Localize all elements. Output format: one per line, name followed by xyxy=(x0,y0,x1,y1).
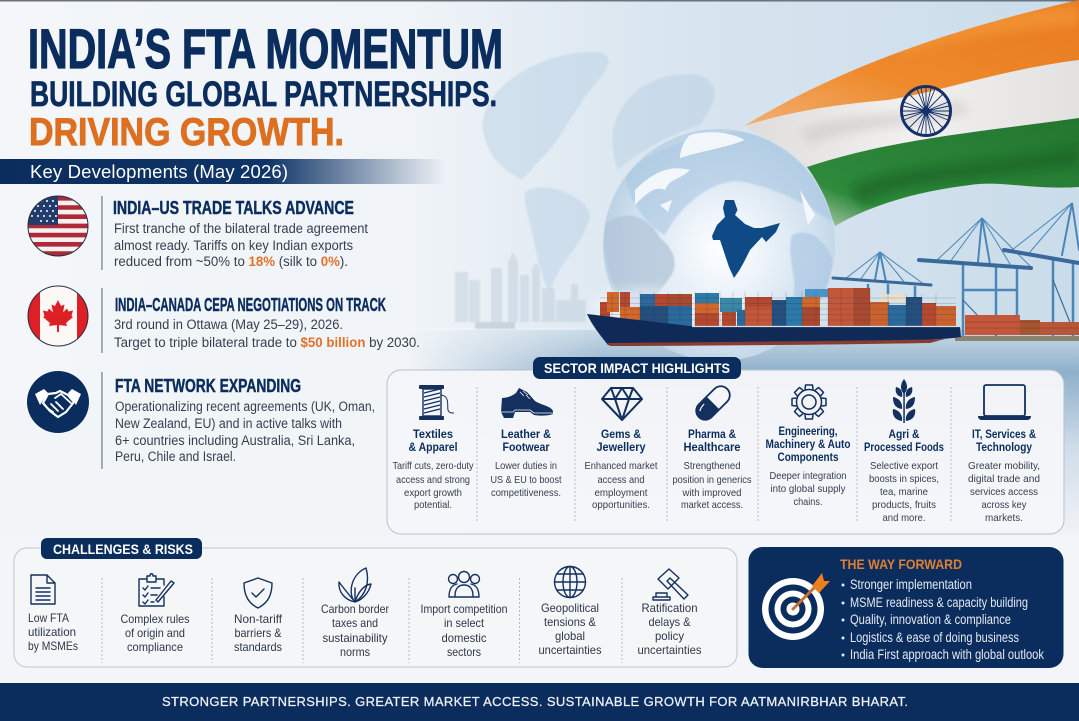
way forward list xyxy=(842,577,1044,662)
footer banner: STRONGER PARTNERSHIPS. GREATER MARKET ACCESS. SUSTAINABLE GROWTH FOR AATMANIRBHAR BHARAT. xyxy=(162,694,908,709)
skyline xyxy=(455,252,586,329)
sector: engineering: chains. xyxy=(794,496,822,508)
development: India-US xyxy=(28,196,368,270)
challenge: non-tariff barriers: Non-tariff xyxy=(234,612,283,626)
sector: leather: competitiveness. xyxy=(491,487,561,499)
heading pill: SECTOR IMPACT HIGHLIGHTS xyxy=(544,360,730,376)
globe with India xyxy=(590,129,836,361)
footer banner xyxy=(0,683,1079,721)
challenge: geopolitical: uncertainties xyxy=(538,643,602,657)
icon: target with arrow xyxy=(762,573,830,640)
sector: agri: boosts in spices, xyxy=(869,473,939,485)
sector: agri: tea, marine xyxy=(880,486,928,498)
challenge: non-tariff barriers: standards xyxy=(234,640,282,654)
challenge: ratification: Ratification xyxy=(642,601,698,615)
development: FTA network xyxy=(27,371,375,469)
India map xyxy=(712,200,780,278)
section band: key developments xyxy=(0,159,445,184)
panel: the way forward xyxy=(748,547,1064,668)
development: India-Canada: 3rd round in Ottawa (May 25–29), 2026. xyxy=(114,317,343,332)
sector: gems: Enhanced market xyxy=(584,460,658,472)
hull xyxy=(587,314,961,345)
sector: IT: IT, Services & xyxy=(972,427,1036,441)
sector: engineering: into global supply xyxy=(770,483,846,495)
challenge: carbon border taxes: norms xyxy=(340,645,370,659)
sector: leather: Leather & xyxy=(501,427,551,441)
sector: engineering: Components xyxy=(778,450,839,464)
sector: pharma: market access. xyxy=(681,499,743,511)
challenge: rules of origin: Complex rules xyxy=(120,612,190,626)
challenge: rules of origin: of origin and xyxy=(125,626,185,640)
development: FTA network: 6+ countries including Australia, Sri Lanka, xyxy=(115,433,355,448)
sector: textiles: Tariff cuts, zero-duty xyxy=(392,460,474,472)
development: FTA network: FTA NETWORK EXPANDING xyxy=(115,376,301,396)
sector: gems: Jewellery xyxy=(596,440,646,454)
challenge: low utilization: Low FTA xyxy=(28,611,69,625)
challenge: rules of origin: compliance xyxy=(127,640,183,654)
way forward list: MSME readiness & capacity building xyxy=(850,595,1028,610)
world map backdrop xyxy=(482,52,715,292)
sector: gems: Gems & xyxy=(601,427,641,441)
challenge: low utilization: utilization xyxy=(28,625,76,639)
flag folds xyxy=(800,5,1079,205)
sector: agri xyxy=(864,379,944,524)
sector: gems xyxy=(584,388,658,511)
sector: agri: Selective export xyxy=(870,460,938,472)
heading pill xyxy=(41,538,202,559)
sector: IT xyxy=(968,385,1040,524)
sector: textiles: access and strong xyxy=(396,474,470,486)
development: India-US: almost ready. Tariffs on key Indian exports xyxy=(114,238,353,253)
sector: leather: US & EU to boost xyxy=(490,474,562,486)
challenge: geopolitical xyxy=(538,566,602,657)
development: India-Canada: INDIA–CANADA CEPA NEGOTIATIONS ON TRACK xyxy=(115,295,386,315)
top edge line xyxy=(0,0,1079,2)
title: DRIVING GROWTH. xyxy=(29,111,344,154)
sector: leather: Lower duties in xyxy=(495,460,557,472)
sector: IT: Technology xyxy=(976,440,1032,454)
challenge: carbon border taxes: taxes and xyxy=(332,616,378,630)
development: India-US: reduced from ~50% to 18% (silk to 0%). xyxy=(114,254,348,269)
development: India-Canada: Target to triple bilateral trade to $50 billion by 2030. xyxy=(114,335,420,350)
challenge: ratification: uncertainties xyxy=(638,643,702,657)
sector: pharma: Healthcare xyxy=(684,440,741,454)
development: India-US: First tranche of the bilateral trade agreement xyxy=(114,221,368,236)
icon: Ashoka Chakra xyxy=(902,86,950,136)
challenge: low utilization xyxy=(28,575,78,653)
sector: IT: services access xyxy=(970,486,1038,498)
icon: handshake xyxy=(27,371,89,433)
sector: agri: Processed Foods xyxy=(864,440,944,454)
sector: engineering: Engineering, xyxy=(778,424,838,438)
challenge: import competition: in select xyxy=(444,616,485,630)
development: FTA network: New Zealand, EU) and in active talks with xyxy=(115,416,342,431)
way forward list: Stronger implementation xyxy=(850,577,972,592)
way forward list: Quality, innovation & compliance xyxy=(850,612,1011,627)
heading pill: CHALLENGES & RISKS xyxy=(53,541,193,557)
challenge: ratification: delays & xyxy=(648,615,690,629)
development: India-US: INDIA–US TRADE TALKS ADVANCE xyxy=(113,198,354,218)
challenge: import competition: Import competition xyxy=(420,602,508,616)
development: FTA network: Operationalizing recent agreements (UK, Oman, xyxy=(115,399,375,414)
way forward list: India First approach with global outlook xyxy=(850,647,1044,662)
title xyxy=(28,17,503,154)
sector: IT: digital trade and xyxy=(968,473,1040,485)
sector: leather xyxy=(490,388,562,499)
challenge: ratification xyxy=(638,569,702,657)
quay containers xyxy=(955,315,1079,341)
haze behind ship xyxy=(590,287,710,323)
sector: agri: and more. xyxy=(882,512,926,524)
container ship xyxy=(587,288,961,346)
sector: leather: Footwear xyxy=(502,440,550,454)
sector: pharma: position in generics xyxy=(672,474,752,486)
sea water xyxy=(0,328,1079,685)
challenge: import competition: domestic xyxy=(442,631,486,645)
sector: engineering: Deeper integration xyxy=(770,470,847,482)
sector: IT: markets. xyxy=(985,512,1023,524)
challenge: carbon border taxes: Carbon border xyxy=(321,602,389,616)
challenge: import competition xyxy=(420,572,508,659)
sector: textiles: Textiles xyxy=(413,427,453,441)
challenge: ratification: policy xyxy=(655,629,684,643)
challenge: rules of origin xyxy=(120,574,190,654)
development: FTA network: Peru, Chile and Israel. xyxy=(115,449,236,464)
title: BUILDING GLOBAL PARTNERSHIPS. xyxy=(30,75,497,114)
sector: engineering: Machinery & Auto xyxy=(766,437,850,451)
containers xyxy=(600,288,956,326)
sector: textiles xyxy=(392,385,474,511)
sector: pharma xyxy=(672,382,752,511)
challenge: carbon border taxes: sustainability xyxy=(322,631,388,645)
challenge: carbon border taxes xyxy=(321,568,389,659)
panel: sector impact highlights xyxy=(387,357,1064,534)
sector: pharma: Pharma & xyxy=(688,427,736,441)
sector: textiles: export growth xyxy=(404,487,462,499)
section band: key developments: Key Developments (May 2026) xyxy=(30,161,288,182)
port cranes xyxy=(833,203,1079,335)
challenge: import competition: sectors xyxy=(447,645,481,659)
sector: gems: opportunities. xyxy=(592,499,650,511)
sector: engineering xyxy=(766,378,850,508)
sector: textiles: & Apparel xyxy=(408,440,458,454)
title: INDIA’S FTA MOMENTUM xyxy=(28,17,503,80)
panel: challenges and risks xyxy=(14,538,737,667)
heading pill xyxy=(533,357,741,379)
sector: gems: employment xyxy=(594,487,648,499)
development: India-Canada xyxy=(28,286,420,353)
challenge: non-tariff barriers: barriers & xyxy=(234,626,282,640)
sector: textiles: potential. xyxy=(414,499,452,511)
sector: gems: access and xyxy=(598,474,645,486)
sector: pharma: Strengthened xyxy=(684,460,741,472)
sector: agri: products, fruits xyxy=(872,499,936,511)
Indian flag xyxy=(744,0,1079,226)
challenge: geopolitical: tensions & xyxy=(544,615,596,629)
challenge: non-tariff barriers xyxy=(234,578,283,654)
sector: IT: across key xyxy=(982,499,1027,511)
icon: Canada flag xyxy=(28,286,88,346)
panel: the way forward: THE WAY FORWARD xyxy=(840,556,962,572)
sector: pharma: with improved xyxy=(682,487,742,499)
way forward list: Logistics & ease of doing business xyxy=(850,630,1019,645)
challenge: low utilization: by MSMEs xyxy=(28,639,78,653)
sector: IT: Greater mobility, xyxy=(968,460,1040,472)
icon: US flag xyxy=(28,196,88,256)
challenge: geopolitical: global xyxy=(555,629,585,643)
sector: agri: Agri & xyxy=(888,427,920,441)
challenge: geopolitical: Geopolitical xyxy=(541,601,599,615)
